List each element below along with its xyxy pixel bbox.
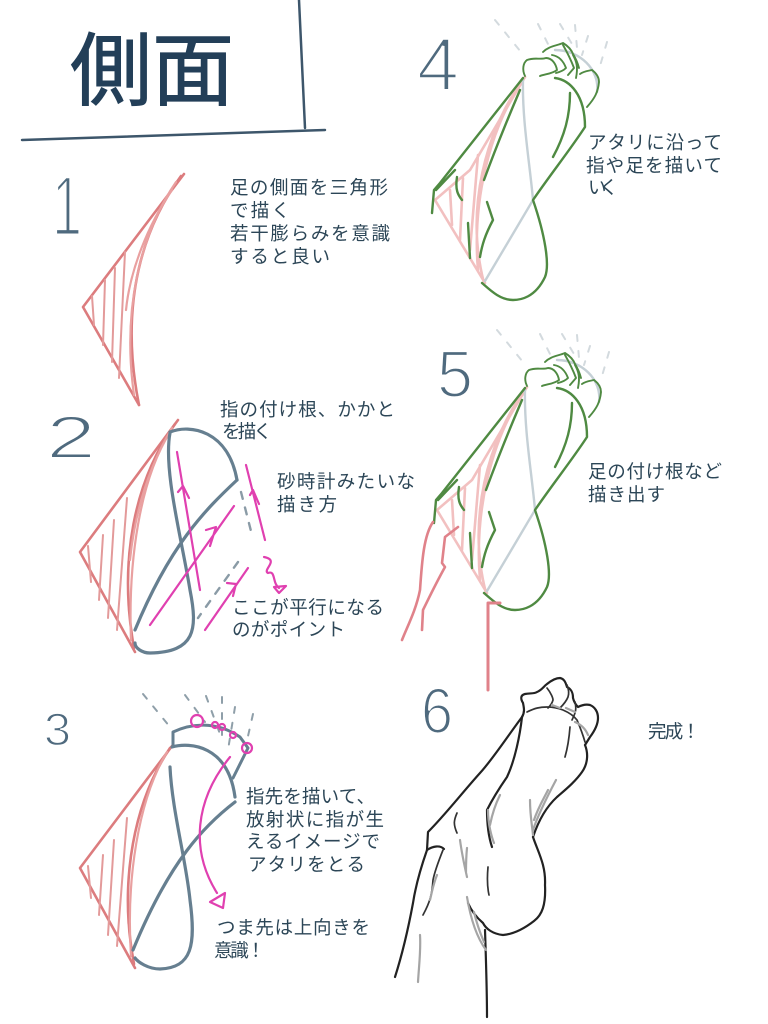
step number 3: 3 <box>44 704 71 755</box>
big toe <box>523 58 557 76</box>
step 1 text: すると良い <box>230 246 330 267</box>
step 2 foot sketch <box>80 420 286 653</box>
step 5 text <box>588 461 722 505</box>
step 6 finished foot drawing <box>395 678 598 1017</box>
step 3 text: fingertips <box>246 786 384 875</box>
step 2 text: hourglass: 描き方 <box>277 494 337 515</box>
step 3 foot sketch <box>80 694 253 969</box>
step 3 text: fingertips: 放射状に指が生 <box>246 809 384 830</box>
step 5 text: 描き出す <box>588 484 665 505</box>
step number 5: 5 <box>437 337 473 412</box>
step 3 text: fingertips: えるイメージで <box>246 831 380 852</box>
step 1 text: で描く <box>230 200 290 221</box>
step 2 text: parallel: ここが平行になる <box>232 597 384 618</box>
step 5 text: 足の付け根など <box>588 461 722 482</box>
step 1 text: 若干膨らみを意識 <box>230 223 390 244</box>
step 3 text: fingertips: アタリをとる <box>248 854 365 875</box>
step 4 foot drawing <box>432 20 607 300</box>
step 2 text: base of toes: を描く <box>222 421 272 442</box>
step 3 text: toe direction: つま先は上向きを <box>217 917 370 938</box>
step 4 text: 指や足を描いて <box>586 155 722 176</box>
step 5 foot drawing <box>402 330 609 690</box>
step number 4: 4 <box>417 22 459 106</box>
step 2 text: hourglass: 砂時計みたいな <box>277 471 415 492</box>
title: 側面: 側面 <box>70 27 234 116</box>
step number 1: 1 <box>52 159 82 253</box>
middle toes <box>543 43 579 78</box>
step 4 text <box>586 132 722 198</box>
step 1 triangle sketch <box>83 174 184 405</box>
step 4 text: いく <box>588 177 618 198</box>
step 1 text: 足の側面を三角形 <box>230 177 388 198</box>
step 3 text: fingertips: 指先を描いて、 <box>246 786 375 807</box>
step 3 text: toe direction <box>214 917 370 961</box>
title frame <box>22 0 325 140</box>
step 2 text: parallel <box>232 597 384 640</box>
step 2 text: base of toes <box>220 399 395 442</box>
step number 2: 2 <box>46 404 96 471</box>
step 4 text: アタリに沿って <box>588 132 722 153</box>
step 2 text: parallel: のがポイント <box>232 619 345 640</box>
step 2 text: hourglass <box>277 471 415 515</box>
step 2 text: base of toes: 指の付け根、かかと <box>220 399 395 420</box>
step 1 text <box>230 177 390 267</box>
step 3 text: toe direction: 意識！ <box>214 940 265 961</box>
step number 6: 6 <box>421 675 453 747</box>
step 6 text: 完成！ <box>648 721 700 742</box>
small toe <box>580 70 599 107</box>
